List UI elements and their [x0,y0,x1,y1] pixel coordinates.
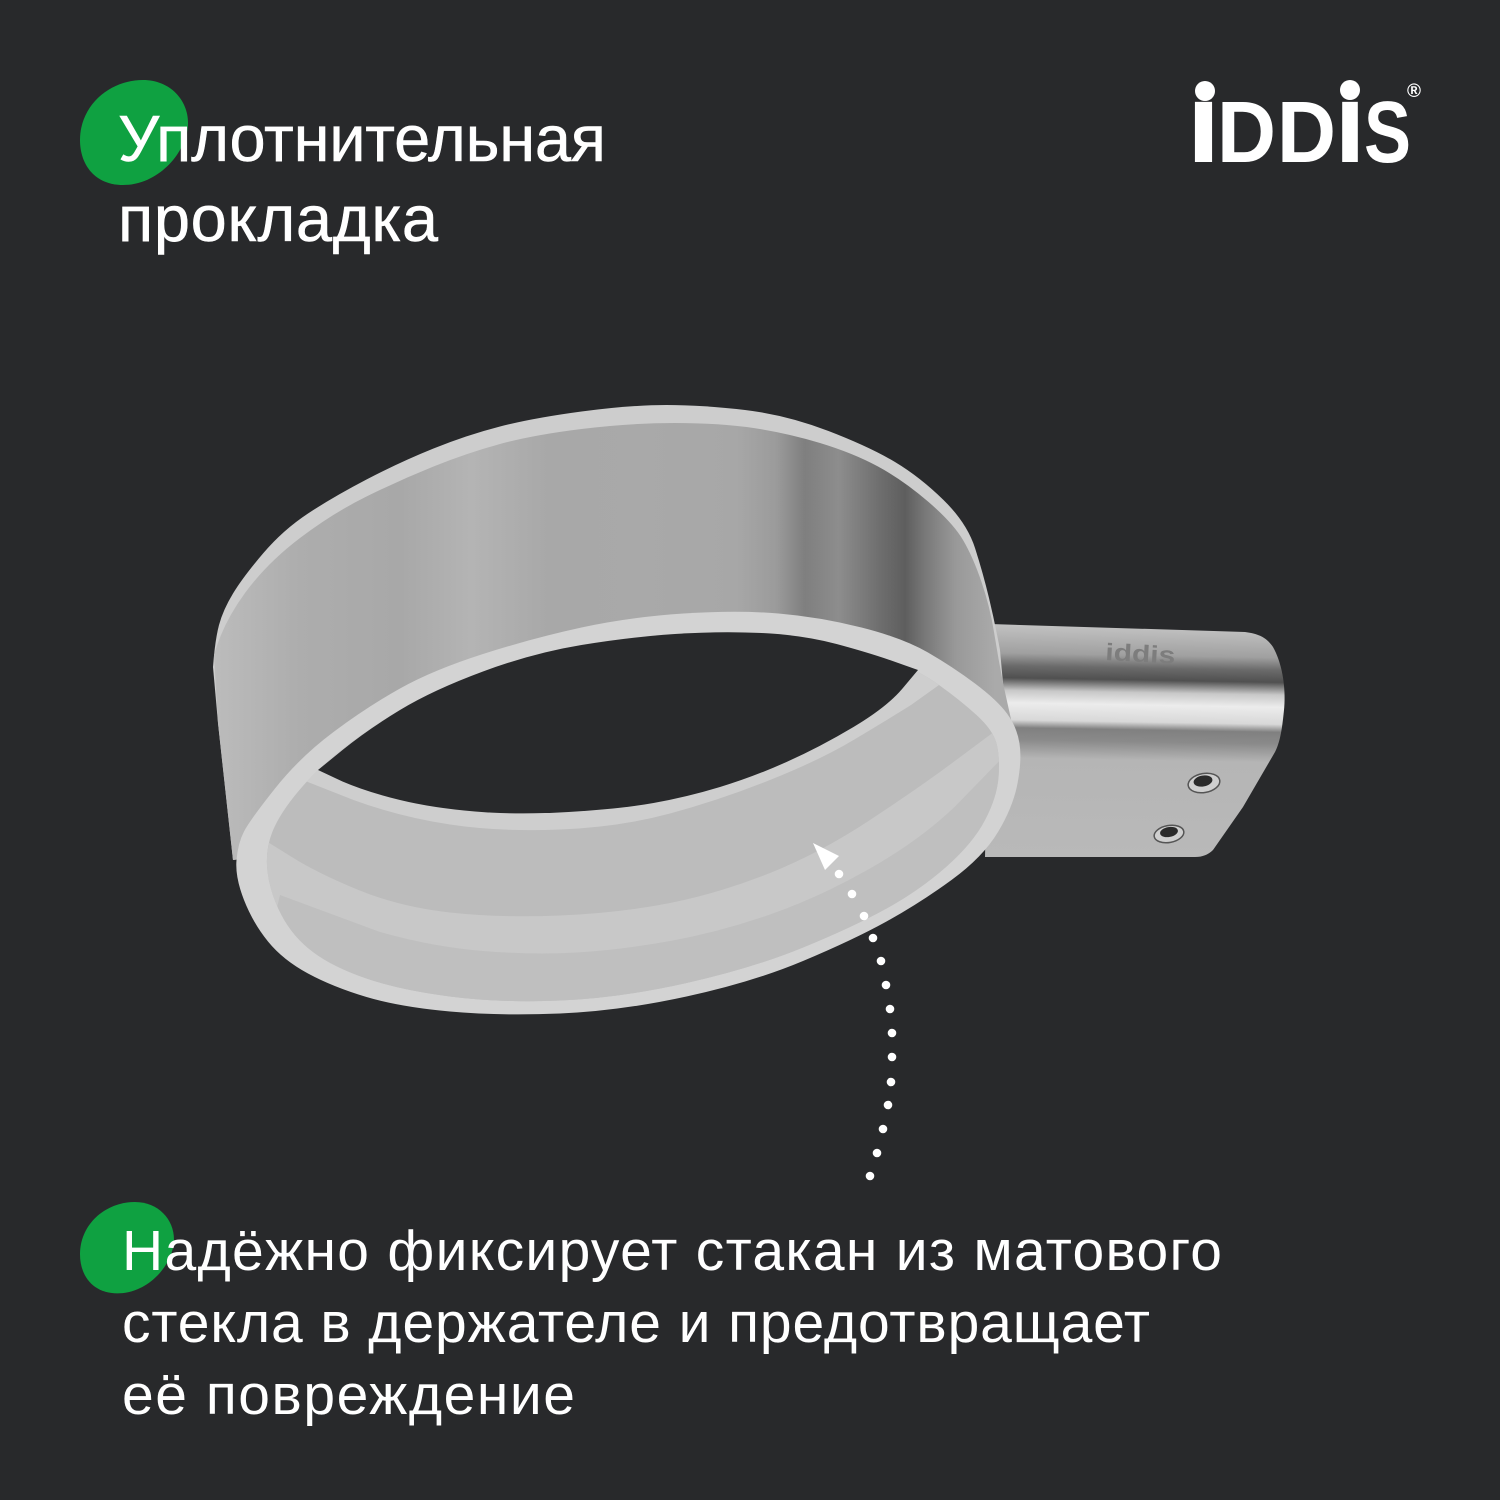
title text: прокладка [118,182,439,255]
title text: Уплотнительная [118,102,606,175]
lower band [278,762,998,1001]
screw lower [1153,823,1185,845]
logo: IDDIS: S [1364,84,1411,181]
green blob: title [80,80,188,185]
arm engraved logo: iddis [1105,639,1176,670]
description block with green blob [80,1202,1222,1427]
logo: IDDIS: D [1217,84,1276,181]
steel band [214,423,1020,860]
logo: IDDIS: ® [1407,81,1421,102]
dotted arrow [813,843,896,1180]
description text: стекла в держателе и предотвращает [122,1291,1150,1355]
logo: IDDIS: I [1187,84,1220,181]
description text: её повреждение [122,1363,575,1427]
holder arm [985,624,1285,857]
product: holder ring with gasket [200,405,1285,1030]
logo: IDDIS [1187,80,1421,181]
green blob: description [80,1202,174,1293]
logo: IDDIS: I [1335,84,1365,181]
title block with green blob [80,80,606,255]
inner lip [307,672,938,830]
middle band [267,734,998,954]
screw upper [1187,771,1221,795]
gasket interior [267,672,999,1002]
description text: Надёжно фиксирует стакан из матового [122,1219,1222,1283]
hole [318,632,918,813]
front gasket rim [236,612,1020,1014]
back gasket rim [213,405,1010,860]
logo: IDDIS: D [1277,84,1336,181]
